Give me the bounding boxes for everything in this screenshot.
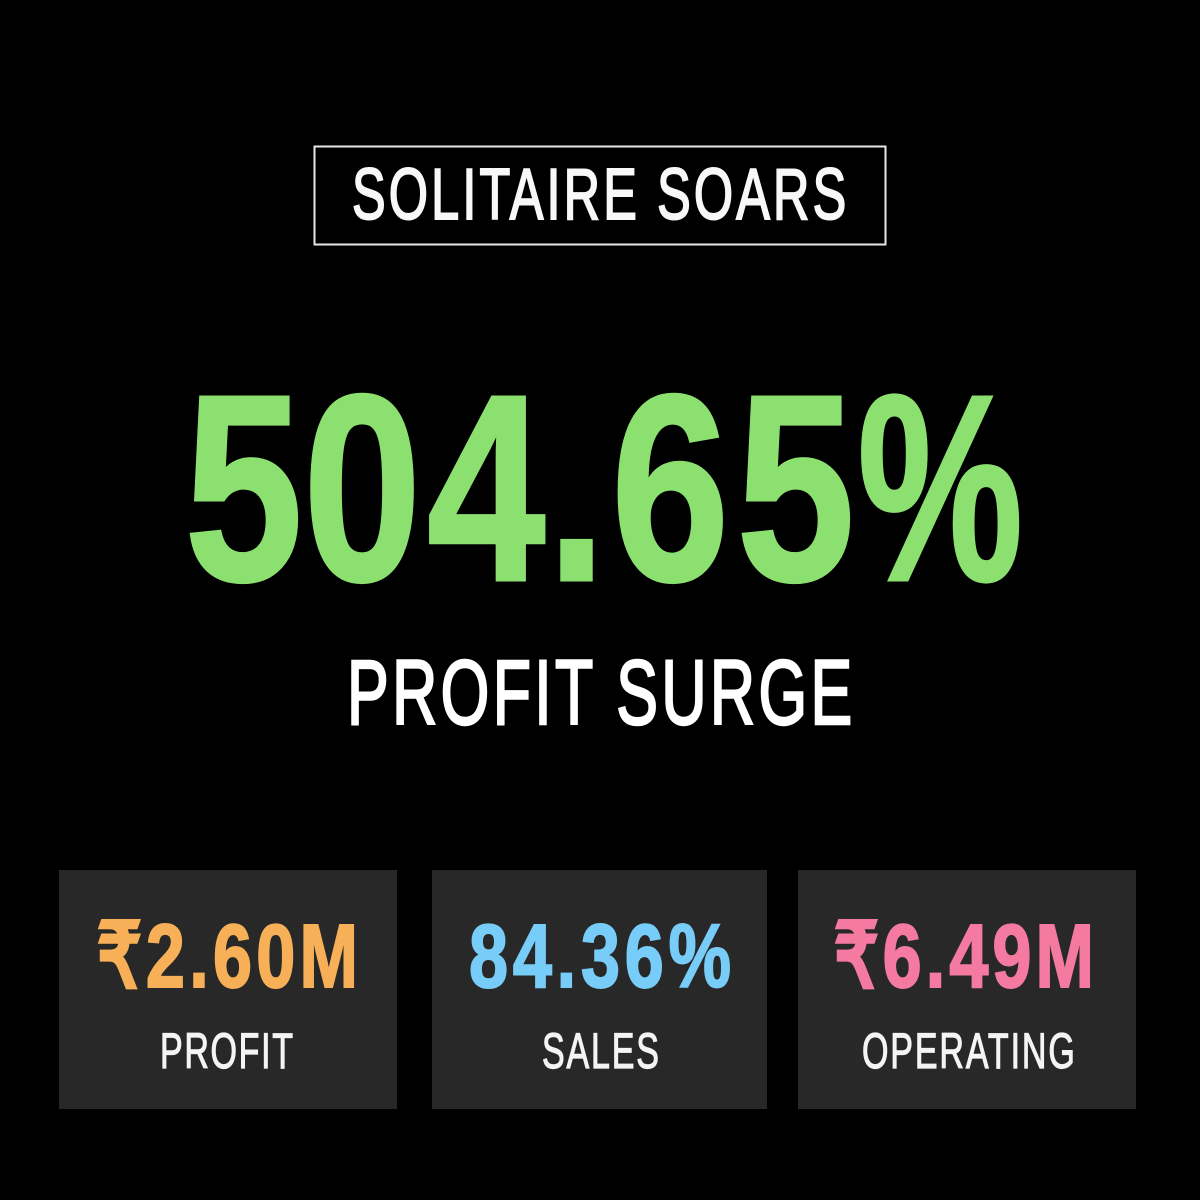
panel: operating	[798, 870, 1136, 1109]
panel: sales: SALES	[542, 1024, 659, 1080]
headline number: %	[857, 339, 1023, 637]
panel: sales	[432, 870, 767, 1109]
panel: operating: OPERATING	[862, 1024, 1075, 1080]
title badge: SOLITAIRE SOARS	[352, 155, 846, 235]
panel: operating: ₹6.49M	[834, 907, 1094, 1007]
headline label: PROFIT SURGE	[347, 641, 852, 744]
panel: profit: ₹2.60M	[97, 907, 358, 1007]
panel: profit: PROFIT	[160, 1024, 293, 1080]
panel: profit	[59, 870, 397, 1109]
headline number: 504.65	[184, 340, 855, 637]
panel: sales: 84.36%	[469, 907, 731, 1007]
